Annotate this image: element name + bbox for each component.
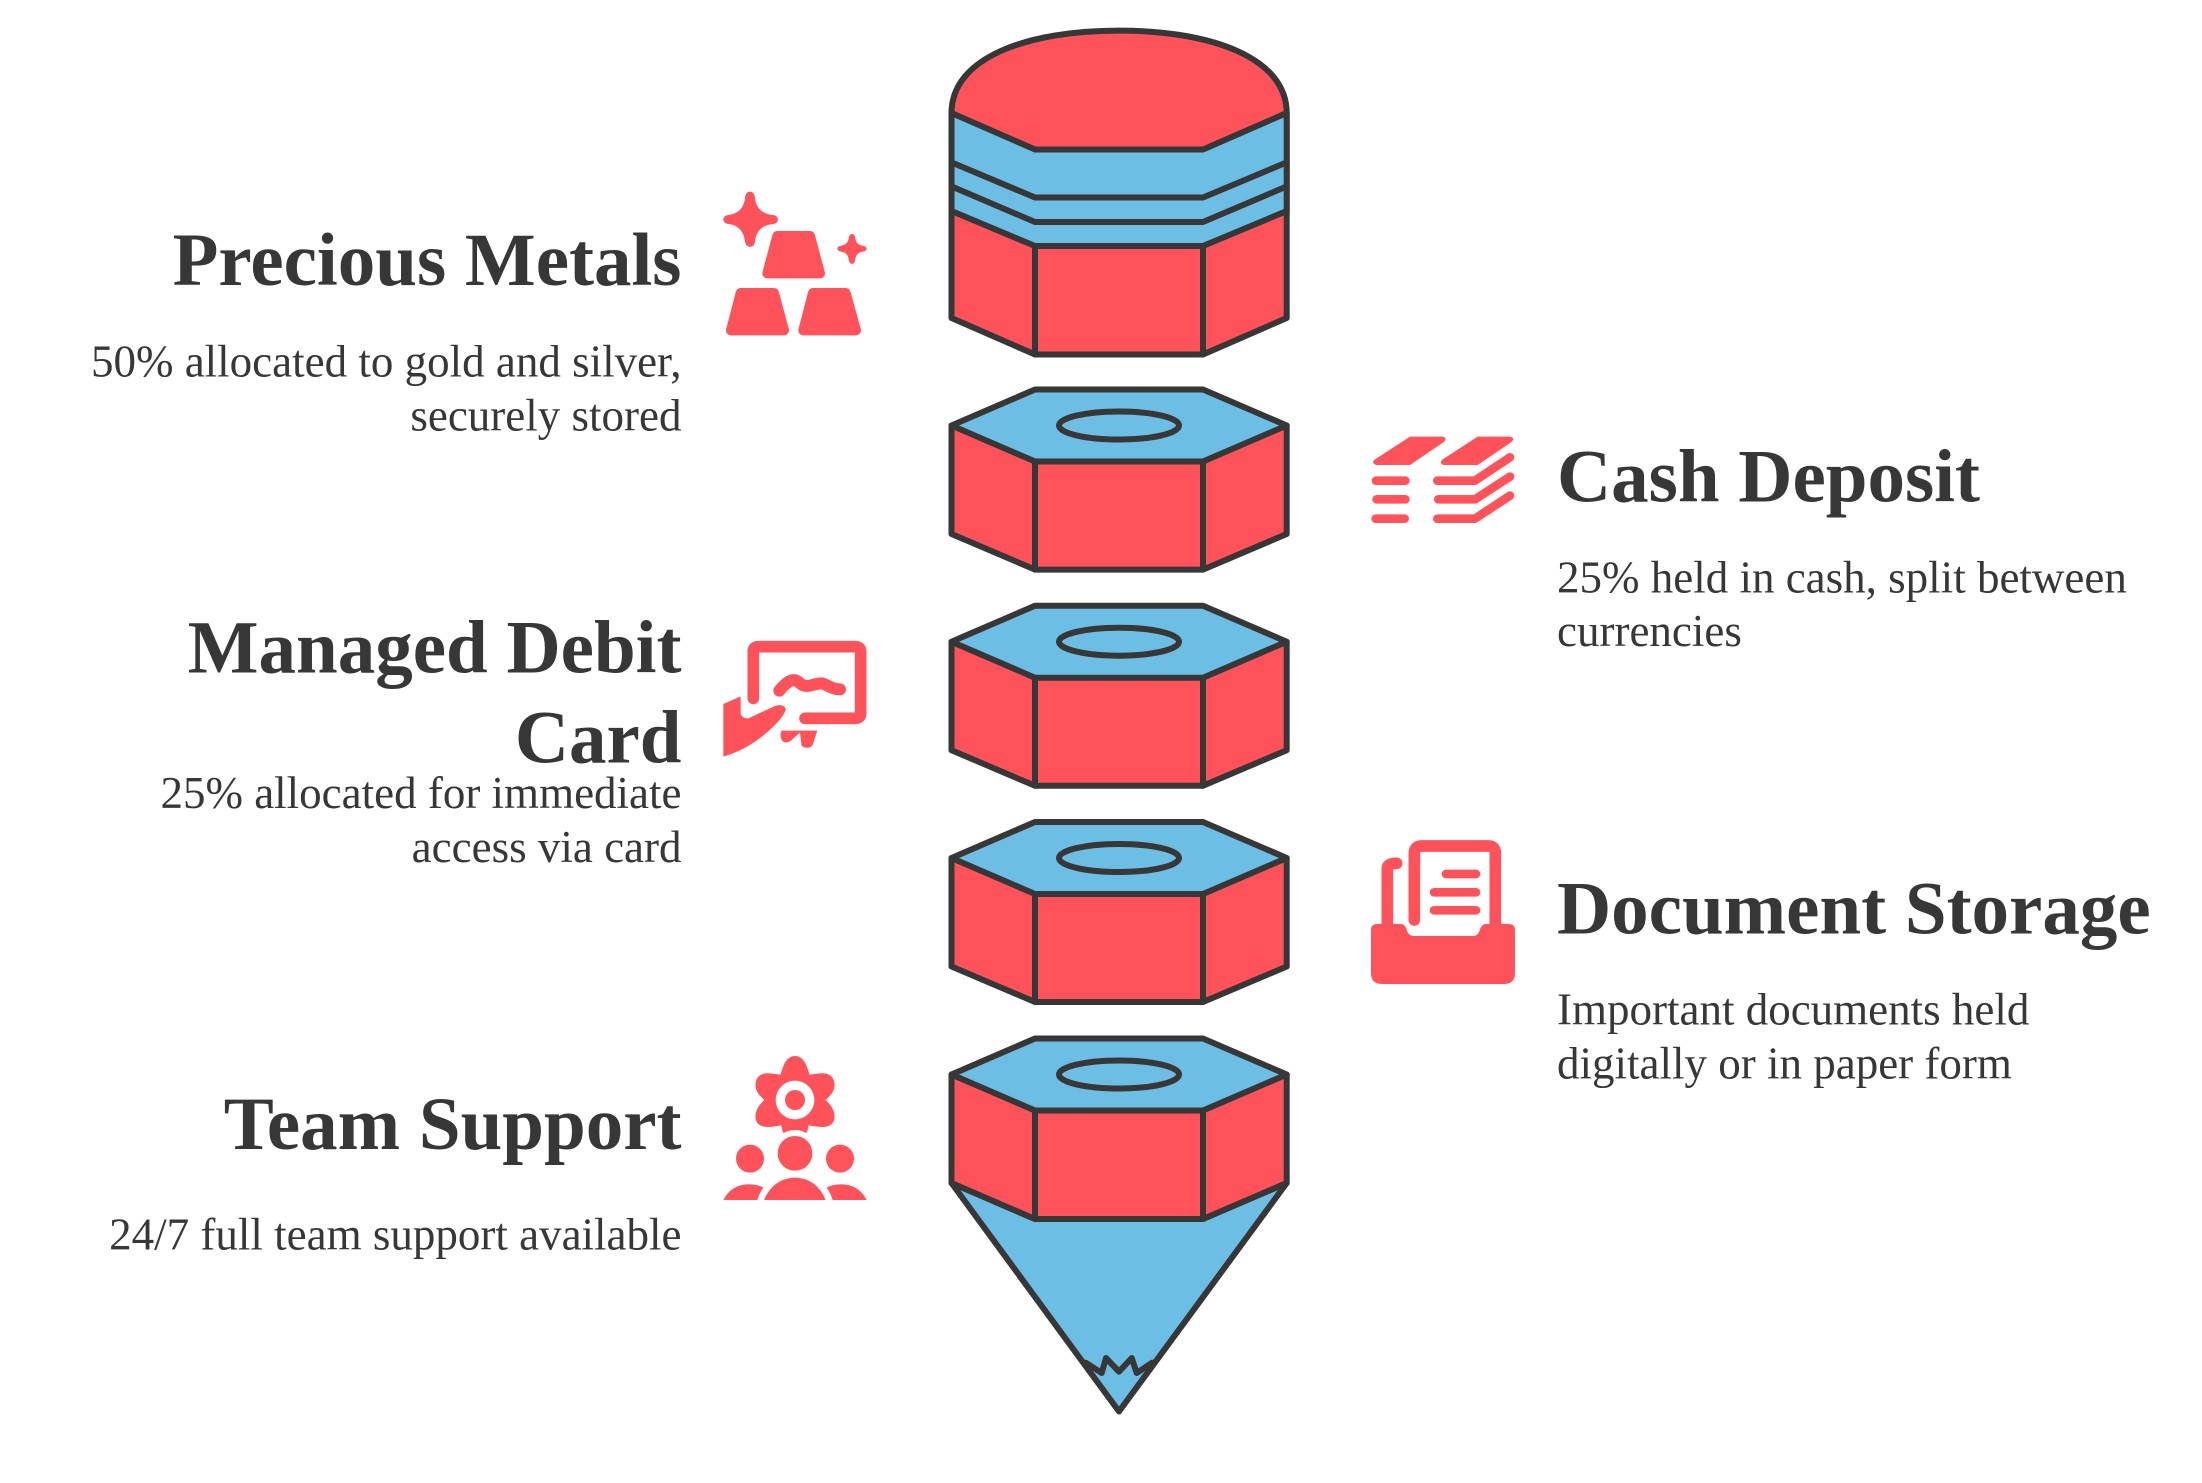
tower cap segment <box>952 31 1287 354</box>
description: Precious Metals <box>91 336 682 440</box>
tower segment 2 <box>952 390 1287 570</box>
panel: Team Support <box>109 1057 867 1259</box>
heading: Team Support: Team Support <box>224 1083 682 1166</box>
heading: Managed Debit Card <box>188 606 682 780</box>
description: Precious Metals: securely stored <box>410 390 682 440</box>
tower segment 3 <box>952 606 1287 786</box>
description: Document Storage: digitally or in paper form <box>1557 1038 2012 1088</box>
description: Document Storage: Important documents held <box>1557 984 2029 1034</box>
description: Cash Deposit: currencies <box>1557 606 1742 656</box>
description: Managed Debit Card: access via card <box>412 822 682 872</box>
icon: team with gear <box>723 1057 867 1200</box>
heading: Managed Debit Card: Card <box>515 696 682 780</box>
tower segment 4 <box>952 822 1287 1002</box>
heading: Managed Debit Card: Managed Debit <box>188 606 682 690</box>
description: Managed Debit Card: 25% allocated for immediate <box>160 768 682 818</box>
tower tip segment <box>952 1038 1287 1412</box>
heading: Document Storage: Document Storage <box>1557 868 2151 950</box>
icon: document tray <box>1371 846 1515 984</box>
description: Cash Deposit <box>1557 552 2127 656</box>
panel: Precious Metals <box>91 192 867 440</box>
description: Cash Deposit: 25% held in cash, split between <box>1557 552 2127 602</box>
description: Managed Debit Card <box>160 768 682 872</box>
heading: Precious Metals: Precious Metals <box>173 219 682 302</box>
panel: Managed Debit Card <box>160 606 861 872</box>
description: Precious Metals: 50% allocated to gold and silver, <box>91 336 682 386</box>
description: Document Storage <box>1557 984 2029 1088</box>
icon: stacks of cash <box>1373 437 1513 519</box>
stacked nut tower <box>952 31 1287 1412</box>
icon: gold bars with sparkles <box>723 192 867 330</box>
heading: Cash Deposit: Cash Deposit <box>1557 435 1980 518</box>
panel: Document Storage <box>1371 846 2151 1088</box>
description: Team Support: 24/7 full team support available <box>109 1209 682 1259</box>
panel: Cash Deposit <box>1373 435 2127 656</box>
icon: hand with card and signature <box>723 647 861 757</box>
